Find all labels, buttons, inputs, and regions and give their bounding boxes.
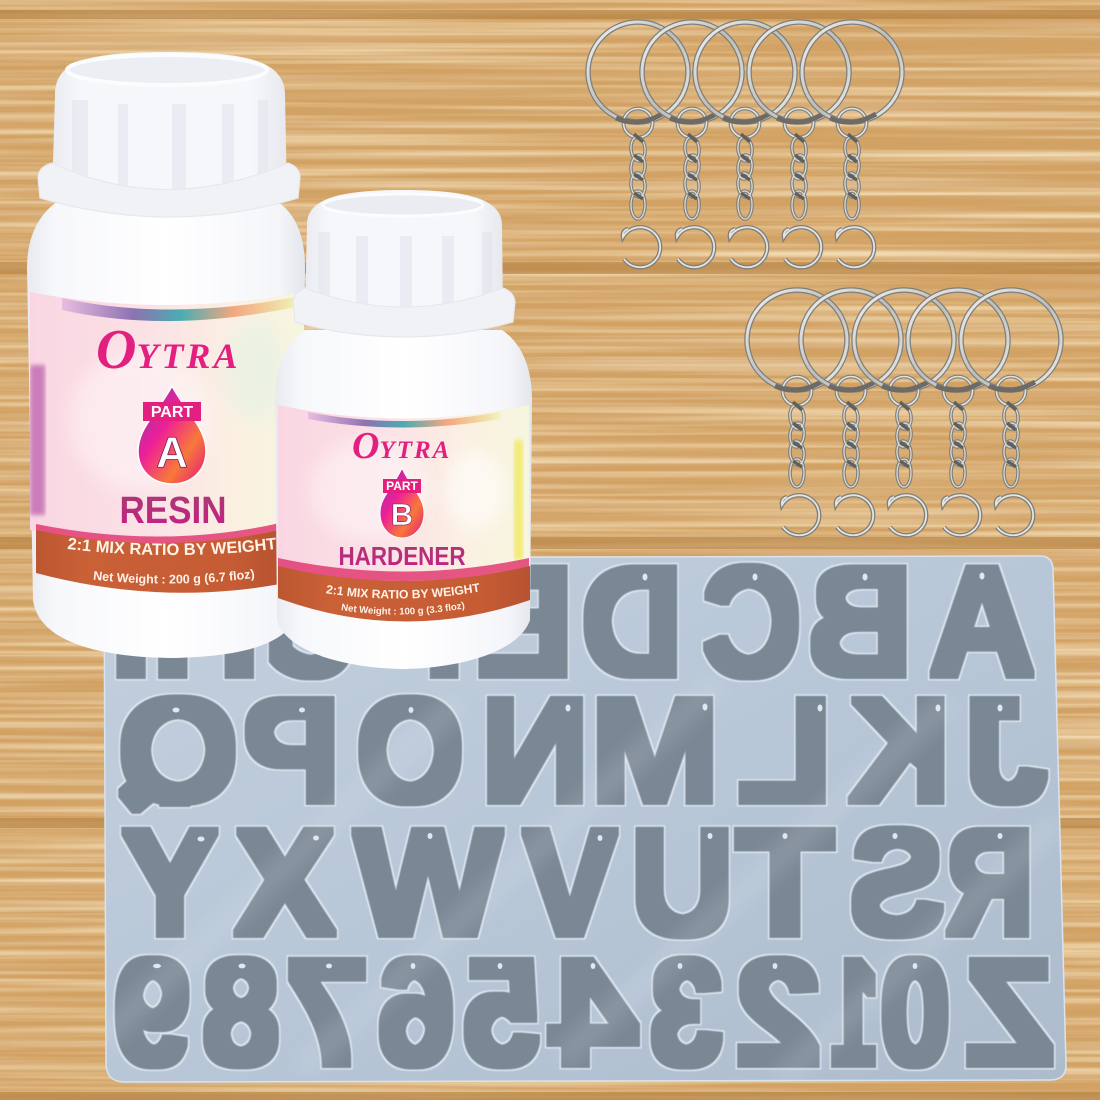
bottle B cap: [293, 190, 515, 337]
key ring 4: [749, 22, 849, 267]
bottle: part A resin: [27, 52, 305, 658]
key rings: lower group: [747, 290, 1061, 535]
bottle B orange band: [278, 566, 530, 622]
mirrored letter and number cavities: 1: [833, 929, 877, 1096]
key ring 5: [802, 22, 902, 267]
mirrored letter and number cavities: A: [930, 535, 1034, 708]
bottle A cap: [38, 52, 300, 217]
icon: part A drop: A: [156, 428, 188, 477]
bottle B label: [278, 405, 530, 581]
icon: part A drop: [138, 386, 206, 484]
logo: Oytra B: OYTRA: [352, 425, 451, 467]
product name: resin: RESIN: [120, 490, 226, 532]
key rings: top group: [588, 22, 902, 267]
mirrored letter and number cavities: N: [481, 669, 589, 833]
key ring 9: [908, 290, 1008, 535]
mirrored letter and number cavities: K: [850, 669, 950, 833]
mirrored letter and number cavities: 0: [880, 929, 950, 1097]
bottle: part B hardener: [275, 190, 532, 669]
product name: hardener: HARDENER: [338, 541, 466, 571]
key ring 7: [801, 290, 901, 535]
mirrored letter and number cavities: H: [152, 536, 260, 709]
silicone alphabet mold: [100, 534, 1066, 1097]
mirrored letter and number cavities: G: [265, 536, 359, 709]
mirrored letter and number cavities: I: [110, 536, 152, 709]
mirrored letter and number cavities: O: [356, 669, 464, 833]
mirrored letter and number cavities: J: [963, 669, 1047, 833]
icon: part B drop: [380, 468, 424, 538]
mirrored letter and number cavities: E: [477, 535, 573, 708]
key ring 8: [854, 290, 954, 535]
key ring 1: [588, 22, 688, 267]
mirrored letter and number cavities: 7: [285, 928, 369, 1096]
mirrored letter and number cavities: 6: [378, 929, 454, 1096]
bottle B body: [275, 330, 532, 669]
bottle A body: [27, 200, 305, 658]
mirrored letter and number cavities: 2: [735, 929, 821, 1096]
mirrored letter and number cavities: L: [738, 669, 832, 833]
mirrored letter and number cavities: T: [736, 799, 834, 966]
logo: Oytra A: OYTRA: [96, 319, 240, 381]
mirrored letter and number cavities: 8: [203, 929, 279, 1096]
icon: part B drop: PART: [386, 479, 419, 493]
net weight text A: Net Weight : 200 g (6.7 floz): [94, 569, 254, 586]
mirrored letter and number cavities: V: [524, 799, 616, 966]
mirrored letter and number cavities: R: [947, 798, 1033, 966]
mold light streaks: [115, 696, 1029, 1068]
mirrored letter and number cavities: B: [808, 535, 912, 708]
net weight text B: Net Weight : 100 g (3.3 floz): [342, 602, 464, 616]
mix ratio text A: 2:1 MIX RATIO BY WEIGHT: [68, 538, 276, 556]
mirrored letter and number cavities: M: [590, 669, 720, 833]
mirrored letter and number cavities: 9: [114, 929, 190, 1096]
keychain holes: [153, 572, 1002, 969]
mirrored letter and number cavities: U: [631, 798, 733, 966]
mirrored letter and number cavities: F: [376, 535, 464, 708]
mirrored letter and number cavities: 3: [650, 928, 722, 1096]
mirrored letter and number cavities: S: [850, 798, 944, 966]
key ring 6: [747, 290, 847, 535]
mirrored letter and number cavities: [110, 534, 1054, 1097]
bottle A orange band: [36, 530, 280, 593]
mirrored letter and number cavities: Y: [123, 798, 217, 966]
mirrored letter and number cavities: C: [703, 534, 801, 708]
mirrored letter and number cavities: Z: [966, 929, 1054, 1097]
mirrored letter and number cavities: P: [244, 668, 340, 832]
key ring 3: [695, 22, 795, 267]
mirrored letter and number cavities: X: [236, 798, 334, 966]
bottle A label: [30, 288, 304, 550]
icon: part B drop: B: [391, 497, 413, 532]
mirrored letter and number cavities: D: [581, 535, 683, 709]
mix ratio text B: 2:1 MIX RATIO BY WEIGHT: [326, 583, 480, 598]
mirrored letter and number cavities: W: [355, 799, 501, 966]
key ring 10: [961, 290, 1061, 535]
mirrored letter and number cavities: Q: [118, 669, 238, 833]
key ring 2: [642, 22, 742, 267]
icon: part A drop: PART: [151, 404, 193, 421]
mirrored letter and number cavities: 4: [550, 929, 638, 1096]
mirrored letter and number cavities: 5: [464, 929, 540, 1096]
